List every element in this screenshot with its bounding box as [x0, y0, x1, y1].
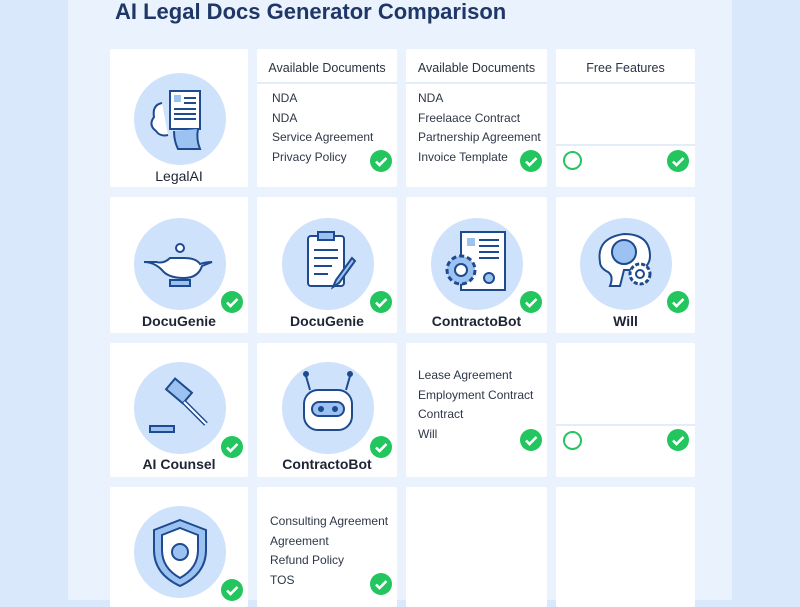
check	[667, 429, 689, 451]
label: DocuGenie	[142, 313, 216, 329]
card: available documents 2: Available Documents	[418, 61, 535, 75]
check	[221, 291, 243, 313]
empty ring	[563, 431, 582, 450]
empty ring	[563, 151, 582, 170]
card: documents 4	[257, 487, 397, 607]
card: Will	[556, 197, 695, 333]
list: Employment Contract	[418, 388, 533, 402]
label: ContractoBot	[282, 456, 372, 472]
check	[667, 150, 689, 172]
card: available documents 1	[257, 49, 397, 187]
list: Lease Agreement	[418, 368, 512, 382]
check	[370, 436, 392, 458]
icon: brain gear	[580, 218, 672, 310]
check	[520, 150, 542, 172]
card: shield	[110, 487, 248, 607]
list: NDA	[272, 110, 297, 124]
label: ContractoBot	[432, 313, 521, 329]
card: ContractoBot gear doc	[406, 197, 547, 333]
label: DocuGenie	[290, 313, 364, 329]
list	[418, 91, 541, 164]
label: LegalAI	[155, 168, 203, 184]
card: empty 2	[556, 487, 695, 607]
icon: gear document	[431, 218, 523, 310]
list: Agreement	[270, 534, 329, 548]
card: ContractoBot robot	[257, 343, 397, 477]
icon: robot	[282, 362, 374, 454]
card: free features	[556, 49, 695, 187]
card: LegalAI	[110, 49, 248, 187]
list: Invoice Template	[418, 150, 508, 164]
check	[667, 291, 689, 313]
list: Freelaace Contract	[418, 110, 520, 124]
card: available documents 1: Available Documents	[268, 61, 386, 75]
icon: gavel	[134, 362, 226, 454]
icon: lamp	[134, 218, 226, 310]
icon: clipboard	[282, 218, 374, 310]
label: AI Counsel	[142, 456, 216, 472]
check	[370, 150, 392, 172]
check	[520, 291, 542, 313]
label: Will	[613, 313, 638, 329]
card: AI Counsel	[110, 343, 248, 477]
card: free features: Free Features	[586, 61, 665, 75]
list: TOS	[270, 572, 294, 586]
icon: brain document	[134, 73, 226, 165]
card: free features 2	[556, 343, 695, 477]
card: DocuGenie lamp	[110, 197, 248, 333]
list: Consulting Agreement	[270, 514, 388, 528]
list: Refund Policy	[270, 553, 344, 567]
list: Service Agreement	[272, 130, 373, 144]
list: NDA	[272, 91, 297, 105]
list	[418, 368, 534, 440]
list: Will	[418, 426, 437, 440]
card: empty 1	[406, 487, 547, 607]
card: available documents 2	[406, 49, 547, 187]
list: Privacy Policy	[272, 150, 347, 164]
card: DocuGenie clipboard	[257, 197, 397, 333]
check	[221, 436, 243, 458]
list	[272, 91, 374, 164]
list: Partnership Agreement	[418, 130, 541, 144]
check	[221, 579, 243, 601]
icon: shield	[134, 506, 226, 598]
check	[370, 291, 392, 313]
list: Contract	[418, 407, 463, 421]
card: documents 3	[406, 343, 547, 477]
check	[520, 429, 542, 451]
check	[370, 573, 392, 595]
list	[270, 514, 388, 586]
list: NDA	[418, 91, 443, 105]
